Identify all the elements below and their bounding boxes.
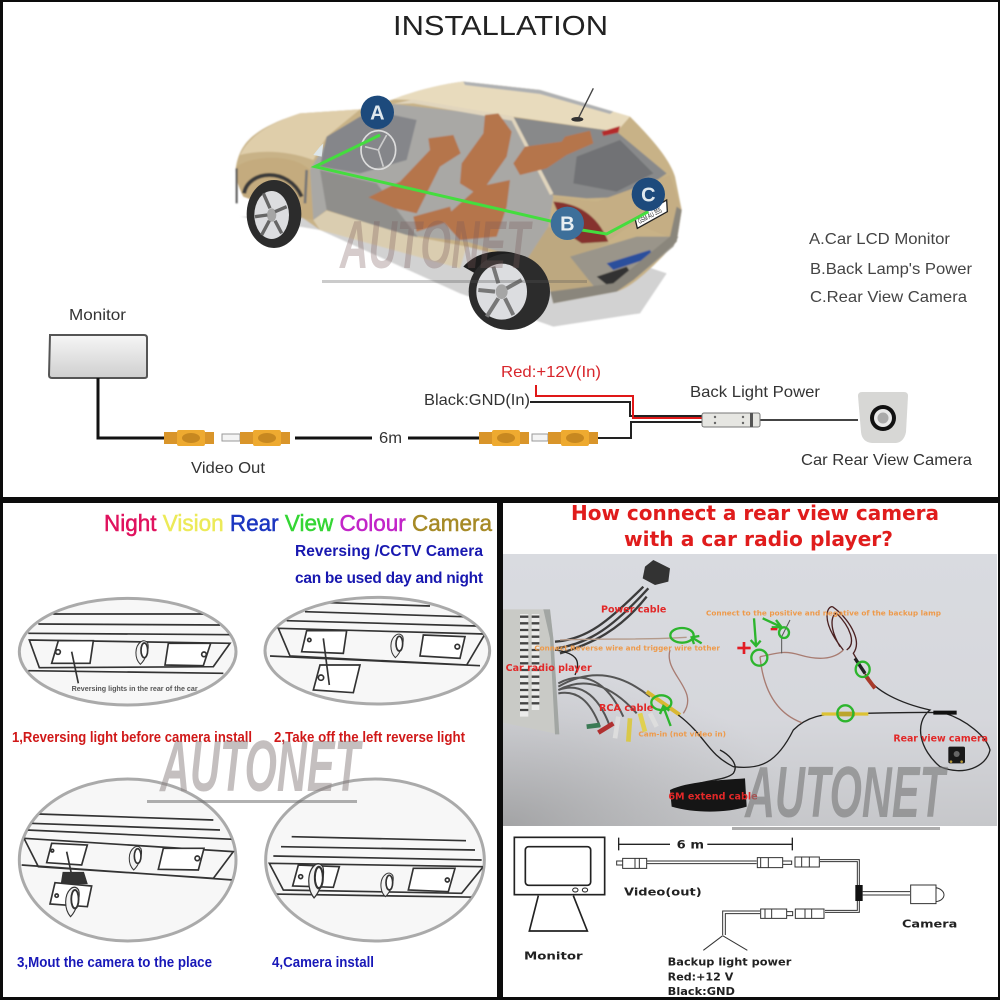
photo labels: RCA cable xyxy=(599,703,653,714)
title: INSTALLATION xyxy=(393,10,608,41)
wiring labels: Red:+12V(In) xyxy=(501,364,601,381)
power plug and harness xyxy=(555,560,687,675)
wiring photo xyxy=(503,554,997,826)
rear camera icon xyxy=(858,392,908,443)
step 1 illustration xyxy=(19,598,236,705)
heading: night vision: Night Vision Rear View Colour Camera xyxy=(104,510,492,536)
legend A B C: C.Rear View Camera xyxy=(810,289,967,306)
monitor icon: Monitor xyxy=(69,307,127,324)
step 1 caption: 1,Reversing light before camera install xyxy=(12,730,252,746)
step 4 caption: 4,Camera install xyxy=(272,955,374,971)
length marker: 6 m xyxy=(677,837,704,851)
heading: how to connect xyxy=(571,501,939,551)
camera xyxy=(948,747,965,763)
in-line module xyxy=(933,707,957,719)
radio unit xyxy=(503,609,559,734)
legend A B C: A.Car LCD Monitor xyxy=(809,231,951,248)
photo labels: 6M extend cable xyxy=(668,791,758,802)
wiring labels xyxy=(191,364,972,477)
schematic labels: Black:GND xyxy=(668,985,735,998)
monitor schematic xyxy=(514,837,605,931)
car cutaway illustration: GSM AU 355 xyxy=(636,206,663,226)
watermark: bottom left: AUTONET xyxy=(159,727,363,807)
heading: how to connect: How connect a rear view camera xyxy=(571,501,939,525)
photo labels: Car radio player xyxy=(506,663,592,674)
back light power module xyxy=(702,413,760,427)
orange notes: Connect to the positive and negative of the backup lamp xyxy=(706,608,941,617)
monitor icon xyxy=(49,307,147,378)
schematic labels: Backup light power xyxy=(668,956,792,969)
video and power cables xyxy=(669,607,990,785)
photo labels: Rear view camera xyxy=(893,734,988,745)
step 3 caption: 3,Mout the camera to the place xyxy=(17,955,212,971)
schematic labels: Monitor xyxy=(524,949,583,962)
panel: install steps xyxy=(12,510,492,971)
watermark: top: AUTONET xyxy=(339,207,533,283)
yellow connector xyxy=(822,709,868,719)
subheading xyxy=(295,543,483,587)
marker B xyxy=(551,207,584,240)
panel: installation overview xyxy=(49,10,973,477)
wiring labels: Car Rear View Camera xyxy=(801,452,972,469)
wiring labels: 6m xyxy=(379,430,402,447)
step 3 illustration xyxy=(19,779,236,941)
cable schematic xyxy=(617,857,944,950)
step 1 illustration: Reversing lights in the rear of the car xyxy=(72,686,198,693)
cable coil xyxy=(670,778,747,812)
plus minus marks xyxy=(737,628,777,654)
car cutaway illustration xyxy=(236,82,682,330)
step 2 caption: 2,Take off the left reverse light xyxy=(274,730,465,746)
wiring diagram xyxy=(98,364,972,477)
orange notes: Cam-in (not video in) xyxy=(638,729,726,738)
orange notes: Connect Reverse wire and trigger wire tother xyxy=(534,644,720,653)
schematic diagram xyxy=(514,837,957,998)
schematic labels xyxy=(524,885,957,998)
marker B: B xyxy=(560,213,575,235)
legend A B C: B.Back Lamp's Power xyxy=(810,261,973,278)
schematic labels: Red:+12 V xyxy=(668,970,734,983)
step 2 illustration xyxy=(265,597,490,704)
RCA harness xyxy=(558,675,650,727)
photo labels: Power cable xyxy=(601,605,666,616)
subheading: can be used day and night xyxy=(295,570,483,587)
RCA connector pair right xyxy=(479,430,598,446)
marker C: C xyxy=(641,184,656,206)
length marker xyxy=(619,837,792,851)
marker A xyxy=(361,96,394,129)
wiring labels: Back Light Power xyxy=(690,384,821,401)
schematic labels: Video(out) xyxy=(624,885,702,898)
marker A: A xyxy=(370,102,385,124)
legend A B C xyxy=(809,231,973,306)
front wheel xyxy=(247,180,301,248)
orange notes xyxy=(534,608,941,738)
bumper parts xyxy=(570,237,678,290)
rear wheel xyxy=(463,251,550,330)
wiring labels: Video Out xyxy=(191,460,266,477)
marker C xyxy=(632,178,665,211)
RCA connector pair left xyxy=(164,430,290,446)
photo labels xyxy=(506,605,988,802)
watermark: bottom left xyxy=(147,727,363,807)
subheading: Reversing /CCTV Camera xyxy=(295,543,483,560)
step 4 illustration xyxy=(266,779,484,941)
green wiring xyxy=(315,135,648,234)
wiring labels: Black:GND(In) xyxy=(424,392,530,409)
panel: radio connection xyxy=(503,501,997,998)
heading: how to connect: with a car radio player? xyxy=(624,527,893,551)
plate xyxy=(635,200,667,228)
tail lamp xyxy=(553,202,608,243)
green circles and arrows xyxy=(651,618,870,726)
seats xyxy=(368,113,593,240)
schematic labels: Camera xyxy=(902,918,957,931)
